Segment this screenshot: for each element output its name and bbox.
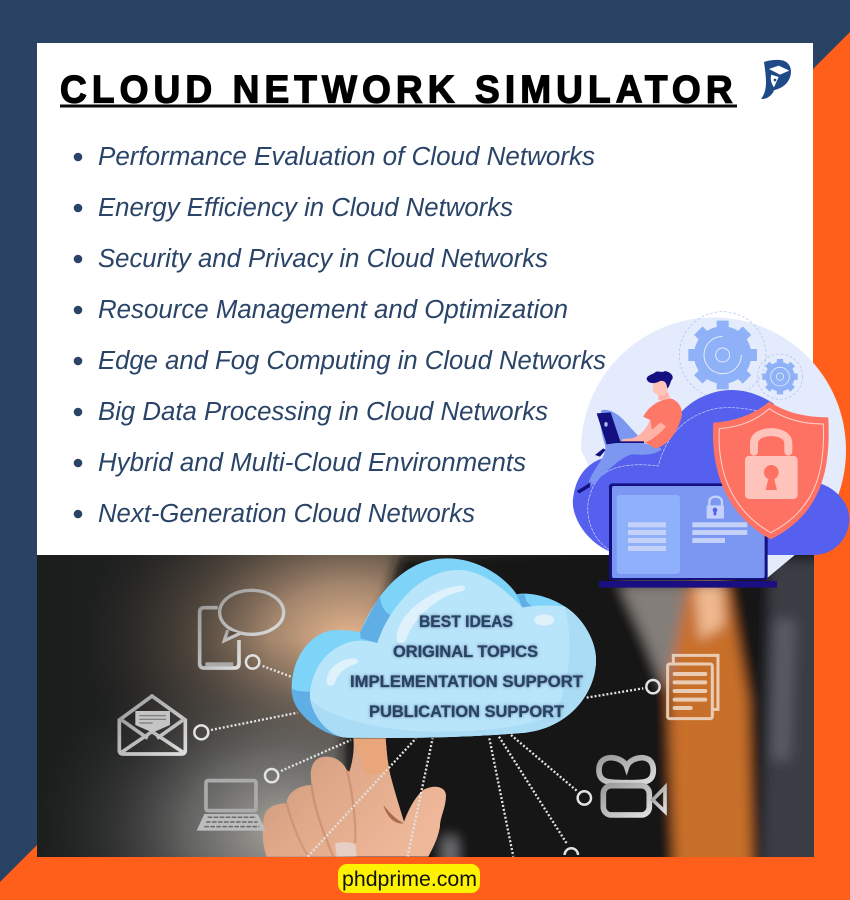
icon: document stack <box>668 655 718 719</box>
connector circles <box>194 655 278 782</box>
dotted connectors <box>211 666 433 857</box>
list item 6: Big Data Processing in Cloud Networks <box>98 398 548 426</box>
list item 3: Security and Privacy in Cloud Networks <box>98 245 548 273</box>
cloud text: IMPLEMENTATION SUPPORT <box>350 673 583 691</box>
title: CLOUD NETWORK SIMULATOR <box>60 69 733 112</box>
bulleted topic list <box>74 143 606 528</box>
list item 7: Hybrid and Multi-Cloud Environments <box>98 449 526 477</box>
cloud dark edges <box>292 594 533 738</box>
gears <box>679 312 803 399</box>
icon: video camera <box>599 758 665 815</box>
icon: open envelope <box>119 696 185 754</box>
right dark suit side <box>337 555 814 857</box>
panel: photo of hand touching network cloud <box>37 555 814 857</box>
cloud text: ORIGINAL TOPICS <box>393 643 538 661</box>
hand <box>263 738 446 857</box>
icon: phdprime logo <box>761 60 791 99</box>
list item 5: Edge and Fog Computing in Cloud Networks <box>98 347 606 375</box>
cloud front layer <box>310 570 596 738</box>
laptop <box>599 483 777 588</box>
list item 1: Performance Evaluation of Cloud Networks <box>98 143 595 171</box>
list item 8: Next-Generation Cloud Networks <box>98 500 475 528</box>
cloud highlights <box>327 586 465 686</box>
person with laptop <box>577 371 682 493</box>
icon group: left devices with dotted connectors <box>119 590 433 857</box>
connector circles <box>565 680 660 855</box>
cloud text: PUBLICATION SUPPORT <box>369 703 564 721</box>
blue cloud <box>573 390 849 555</box>
icon: laptop <box>197 781 266 831</box>
cloud lower shade <box>310 607 596 738</box>
cloud with text <box>292 558 596 738</box>
pale circle backdrop <box>581 318 846 579</box>
dotted connectors <box>489 688 643 857</box>
cloud back layer <box>292 558 596 738</box>
website badge: phdprime.com <box>342 868 477 891</box>
panel: white list card <box>37 43 813 555</box>
list item 2: Energy Efficiency in Cloud Networks <box>98 194 513 222</box>
cloud text: BEST IDEAS <box>419 613 513 631</box>
list item 4: Resource Management and Optimization <box>98 296 568 324</box>
cloud text <box>350 613 583 721</box>
illustration: cloud security <box>338 312 849 893</box>
finger shading <box>353 738 390 773</box>
icon group: right devices with dotted connectors <box>489 655 718 857</box>
shield with padlock <box>713 402 829 539</box>
icon: phone with speech bubble <box>200 590 284 668</box>
